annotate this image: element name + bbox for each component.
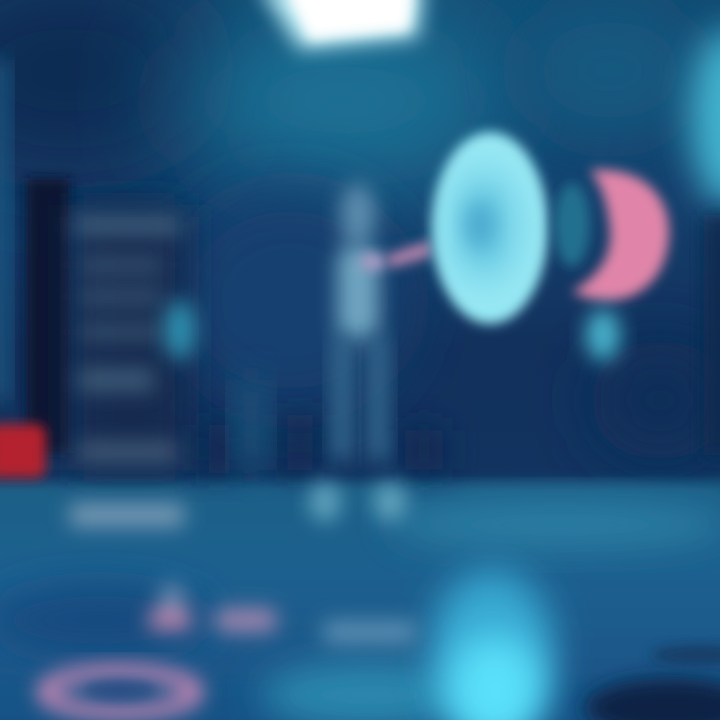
pillar glow <box>238 380 264 470</box>
cyan link between lens and crescent <box>554 183 590 267</box>
ceiling light <box>258 0 425 50</box>
pink arm link <box>385 240 432 268</box>
pink floor labels <box>148 582 417 644</box>
pink oval ring label <box>44 672 196 712</box>
pink crescent <box>572 170 669 301</box>
floor highlights <box>0 501 720 720</box>
floor <box>0 482 720 720</box>
right dark pillar <box>704 215 720 455</box>
dark bottom-right shape <box>585 645 720 720</box>
dark floor shadows <box>205 415 443 473</box>
floor light reflection <box>430 570 554 720</box>
blurred text block <box>70 216 184 527</box>
human figure <box>309 183 407 522</box>
right edge glow <box>690 28 720 208</box>
background wall <box>0 0 720 500</box>
small cyan glow beside text <box>164 300 196 360</box>
cyan lens <box>432 132 548 324</box>
cyan stem below crescent <box>586 309 620 361</box>
dark column panel <box>26 178 187 470</box>
red badge <box>0 424 46 478</box>
